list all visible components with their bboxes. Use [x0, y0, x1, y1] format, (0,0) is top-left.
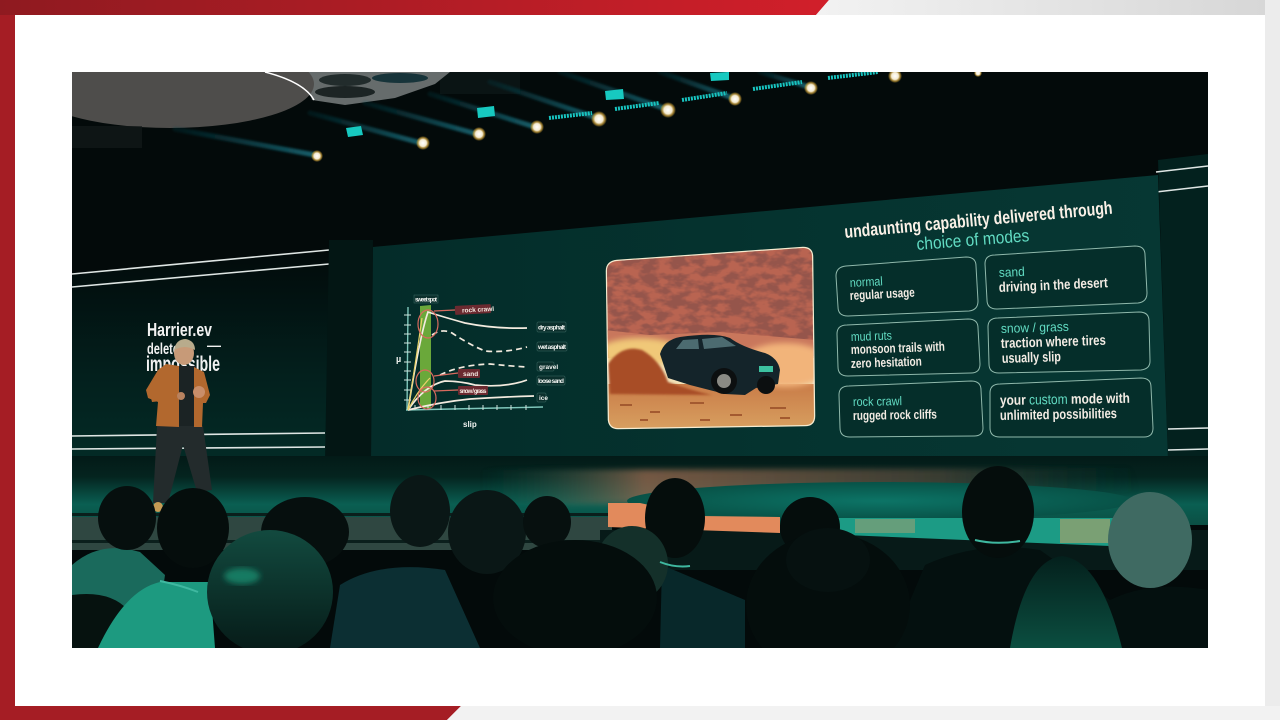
mode card: snow / grass: usually slip	[1002, 348, 1061, 366]
presenter: arm across chest	[150, 392, 180, 402]
audience: foreground heads	[493, 540, 657, 656]
presenter: dark shirt	[178, 366, 196, 426]
mode card: custom	[990, 378, 1153, 437]
friction chart	[396, 295, 567, 429]
audience: long hair	[1010, 556, 1122, 648]
left screen text: impossible	[146, 353, 220, 376]
off-road car photo	[606, 246, 816, 430]
photo: car windows	[676, 337, 736, 349]
presenter: legs	[153, 426, 212, 503]
photo: ground speckle	[620, 403, 790, 420]
chart: mode callouts: sand	[463, 371, 478, 378]
mode card: rock crawl: rugged rock cliffs	[853, 407, 937, 423]
mode card: custom: your custom mode with	[1000, 390, 1130, 408]
slide heading: choice of modes	[916, 225, 1030, 254]
audience: lanyards	[160, 540, 1020, 592]
chart: surface labels: sweet spot	[415, 298, 437, 304]
stage floor	[72, 456, 1208, 570]
chart: mode callouts	[455, 304, 495, 395]
orange lit riser	[608, 503, 780, 533]
chart: surface labels: µ	[396, 354, 401, 364]
mode card: mud ruts: zero hesitation	[851, 354, 922, 371]
presenter: shoes	[153, 502, 163, 512]
audience: grey head	[1108, 492, 1192, 588]
chart: highlight circles	[416, 310, 458, 409]
left screen text	[147, 322, 221, 371]
mode card: snow / grass	[988, 312, 1150, 373]
presenter: orange jacket	[146, 364, 210, 427]
stage light beams	[175, 72, 809, 155]
photo: ground	[605, 384, 817, 430]
mode card: normal: normal	[849, 274, 883, 290]
left screen text: Harrier.ev	[147, 320, 212, 340]
chart: curves	[408, 312, 534, 410]
photo: mountain	[605, 246, 817, 356]
slide heading: undaunting capability delivered through	[844, 198, 1113, 242]
mode card: normal	[836, 257, 978, 316]
photo: lower slope	[605, 330, 815, 358]
mode card: sand	[985, 246, 1147, 309]
audience: back-row bodies	[72, 548, 165, 610]
chart: mode callouts: rock crawl	[462, 306, 495, 315]
teal lit riser	[820, 518, 1120, 546]
mode card: sand: driving in the desert	[998, 274, 1108, 295]
frame: bottom bar grey	[447, 706, 1280, 720]
main presentation slide	[371, 175, 1168, 460]
chart: mode callouts: snow / grass	[460, 389, 487, 395]
wall light lines	[72, 166, 1208, 450]
stage spot lights	[311, 69, 982, 162]
ceiling disc and truss	[72, 72, 520, 148]
presenter: head	[174, 341, 194, 365]
photo: number plate	[759, 366, 773, 372]
frame: red left band	[0, 0, 15, 720]
chart: surface labels: slip	[463, 420, 477, 429]
left screen text: —	[207, 337, 221, 353]
mode card: snow / grass: traction where tires	[1001, 332, 1106, 351]
photo: car body	[660, 335, 780, 395]
stage front ledge	[72, 517, 612, 550]
cyan truss panels	[346, 72, 729, 137]
round stage platform	[627, 482, 1124, 511]
audience: heads	[98, 486, 156, 550]
left side screen	[72, 297, 328, 456]
chart: surface labels: gravel	[539, 364, 558, 371]
mode card: rock crawl: rock crawl	[853, 394, 902, 409]
mode card: normal: regular usage	[849, 285, 915, 303]
left screen text: delete	[147, 341, 179, 358]
chart: surface labels: dry asphalt	[538, 324, 566, 332]
chart: sweet spot band	[420, 305, 431, 408]
mode card: snow / grass: snow / grass	[1001, 319, 1070, 336]
chart: axes	[404, 307, 543, 410]
presenter: hands	[193, 386, 205, 398]
frame: right grey band	[1265, 0, 1280, 720]
frame: top bar red	[0, 0, 829, 15]
chart: surface labels: ice	[539, 395, 548, 402]
audience: bald heads	[207, 530, 333, 654]
chart: surface labels: wet asphalt	[537, 344, 567, 351]
mode card: mud ruts: mud ruts	[851, 329, 892, 344]
frame: bottom bar red	[0, 706, 461, 720]
cyan LED strips	[549, 72, 878, 118]
slide heading	[845, 201, 1112, 250]
screen pillar	[325, 240, 373, 462]
chart: surface labels	[396, 295, 567, 429]
mode card: mud ruts	[837, 319, 980, 376]
photo: car wheels	[711, 368, 737, 394]
frame: top bar grey	[816, 0, 1280, 15]
presenter	[146, 339, 212, 512]
mode card: sand: sand	[998, 264, 1025, 280]
photo: dust plume	[608, 349, 712, 395]
mode card: rock crawl	[839, 381, 983, 437]
right side panel	[1158, 154, 1208, 460]
stage photograph	[72, 72, 1208, 648]
mode card: mud ruts: monsoon trails with	[851, 339, 945, 357]
photo: dust haze	[750, 340, 814, 390]
mode card: custom: unlimited possibilities	[1000, 405, 1117, 423]
audience silhouettes	[72, 466, 1208, 677]
chart: surface labels: loose sand	[538, 378, 564, 385]
